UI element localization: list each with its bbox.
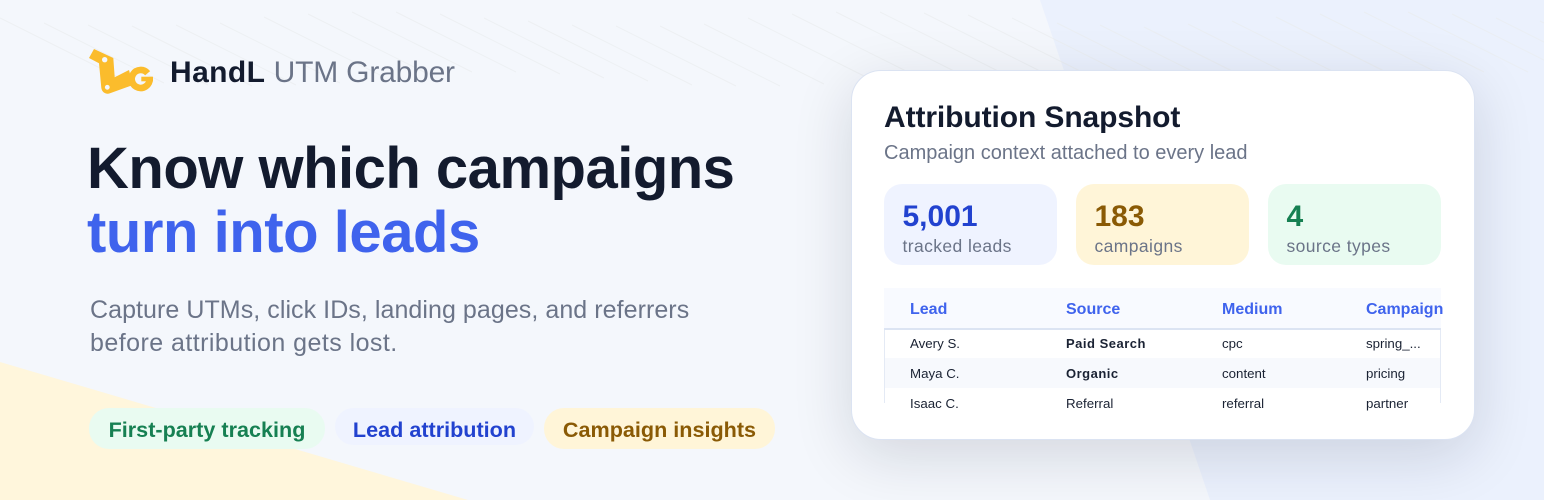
headline: Know which campaigns xyxy=(87,136,734,201)
row 1: Avery S. xyxy=(910,336,960,351)
row 2 xyxy=(910,366,1405,381)
row 1: Paid Search xyxy=(1066,336,1146,351)
subheading: before attribution gets lost. xyxy=(90,329,398,357)
table: leads xyxy=(884,328,1441,403)
logo wordmark: HandL UTM Grabber xyxy=(170,56,455,89)
card heading: Attribution Snapshot xyxy=(884,101,1180,134)
pill: Campaign insights: Campaign insights xyxy=(563,417,756,442)
stat: campaigns: campaigns xyxy=(1094,236,1183,256)
stat: campaigns: 183 xyxy=(1094,200,1145,233)
pill: Campaign insights xyxy=(544,408,775,449)
pill: Lead attribution xyxy=(335,408,534,445)
row 2: content xyxy=(1222,366,1266,381)
row 3: partner xyxy=(1366,396,1408,411)
row 2: pricing xyxy=(1366,366,1405,381)
subheading: Capture UTMs, click IDs, landing pages, and referrers xyxy=(90,296,689,324)
table header: Source: Source xyxy=(1066,300,1120,318)
card subheading: Campaign context attached to every lead xyxy=(884,142,1248,164)
row 3: Isaac C. xyxy=(910,396,959,411)
stat: source types xyxy=(1268,184,1441,265)
row 2: Maya C. xyxy=(910,366,960,381)
row 3: Referral xyxy=(1066,396,1113,411)
table header: Lead: Lead xyxy=(910,300,947,318)
pill: First-party tracking: First-party tracking xyxy=(109,417,305,442)
stat: source types: source types xyxy=(1286,236,1391,256)
stat: tracked leads: tracked leads xyxy=(902,236,1012,256)
stat: campaigns xyxy=(1076,184,1249,265)
row 3: referral xyxy=(1222,396,1264,411)
icon: HandL logo xyxy=(89,49,153,94)
stat: tracked leads xyxy=(884,184,1057,265)
headline: turn into leads xyxy=(87,200,480,265)
headline xyxy=(87,136,734,265)
row 1 xyxy=(910,336,1421,351)
pill: First-party tracking xyxy=(89,408,325,449)
stat: source types: 4 xyxy=(1286,200,1303,233)
table header: Campaign: Campaign xyxy=(1366,300,1443,318)
table header: Medium: Medium xyxy=(1222,300,1282,318)
row 2: Organic xyxy=(1066,366,1119,381)
stat: tracked leads: 5,001 xyxy=(902,200,978,233)
panel: Attribution Snapshot card xyxy=(851,70,1475,440)
pill: Lead attribution: Lead attribution xyxy=(353,417,516,442)
row 1: spring_... xyxy=(1366,336,1421,351)
subheading xyxy=(90,296,689,357)
row 1: cpc xyxy=(1222,336,1243,351)
